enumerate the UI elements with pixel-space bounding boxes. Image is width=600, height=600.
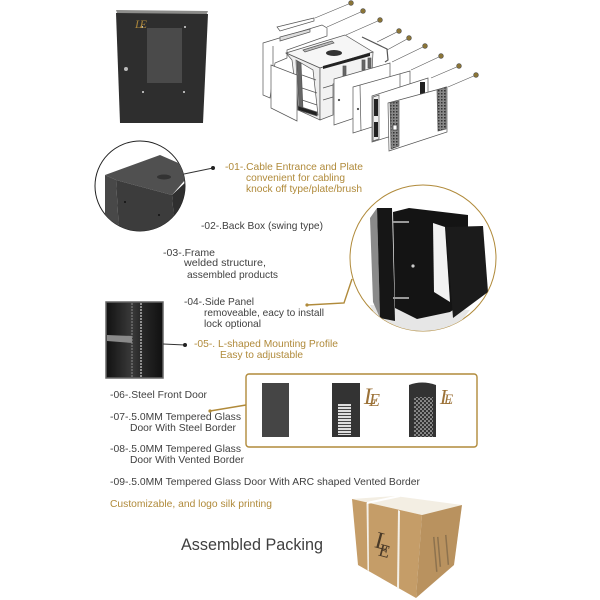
exploded view diagram <box>263 18 447 151</box>
feature list 09: -09-.5.0MM Tempered Glass Door With ARC shaped Vented Border <box>110 476 420 488</box>
back box <box>263 25 327 98</box>
numbered leader lines <box>315 1 478 87</box>
photo: assembled cabinet front <box>116 10 208 123</box>
feature list 04 <box>184 296 324 330</box>
cable plate <box>277 18 314 31</box>
logo: LE: L <box>363 384 377 409</box>
door: steel with vents <box>332 383 360 437</box>
door: arc shaped with perforation <box>409 382 436 437</box>
feature list 03: assembled products <box>187 269 278 281</box>
feature list 08: -08-.5.0MM Tempered Glass <box>110 443 241 455</box>
feature list 02: -02-.Back Box (swing type) <box>201 220 323 232</box>
frame <box>286 35 373 68</box>
customization note: Customizable, and logo silk printing <box>110 498 272 510</box>
door 09 <box>388 87 447 151</box>
side panel <box>271 65 297 121</box>
logo on cabinet: LE <box>134 17 148 31</box>
feature list 08 <box>110 443 244 466</box>
feature list 01: -01-.Cable Entrance and Plate <box>225 161 363 173</box>
door: steel <box>262 383 289 437</box>
photo: packing box <box>352 496 462 598</box>
logo: LE second: E <box>443 392 453 408</box>
callout: cable entrance close-up <box>95 141 215 231</box>
feature list 07: -07-.5.0MM Tempered Glass <box>110 411 241 423</box>
logo on box: L <box>372 528 393 557</box>
feature list 03: welded structure, <box>183 257 266 269</box>
panel: door options <box>208 374 477 447</box>
feature list 01: convenient for cabling <box>246 172 345 184</box>
feature list 05: Easy to adjustable <box>220 349 303 361</box>
feature list 04: lock optional <box>204 318 261 330</box>
door 06 <box>334 63 390 125</box>
feature list 04: removeable, eacy to install <box>204 307 324 319</box>
logo: LE: E <box>368 390 380 410</box>
feature list 04: -04-.Side Panel <box>184 296 254 308</box>
feature list 03: -03-.Frame <box>163 247 215 259</box>
feature list 01 <box>225 161 363 195</box>
door 07 <box>353 71 410 133</box>
feature list 01: knock off type/plate/brush <box>246 183 362 195</box>
callout: mounting profile photo <box>106 302 187 378</box>
logo: LE second: L <box>439 385 452 409</box>
logo on box: E <box>377 540 392 562</box>
feature list 03 <box>163 247 278 281</box>
feature list 07: Door With Steel Border <box>130 422 236 434</box>
rear side bracket <box>362 37 388 62</box>
box label <box>433 535 449 572</box>
feature list 05: -05-. L-shaped Mounting Profile <box>194 338 338 350</box>
door 08 <box>372 78 428 142</box>
packing heading: Assembled Packing <box>181 536 323 554</box>
feature list 06: -06-.Steel Front Door <box>110 389 207 401</box>
vent on frame top <box>326 50 342 56</box>
feature list 05 <box>194 338 338 361</box>
callout: open cabinet with side panel <box>305 185 496 335</box>
feature list 07 <box>110 411 241 434</box>
feature list 08: Door With Vented Border <box>130 454 244 466</box>
